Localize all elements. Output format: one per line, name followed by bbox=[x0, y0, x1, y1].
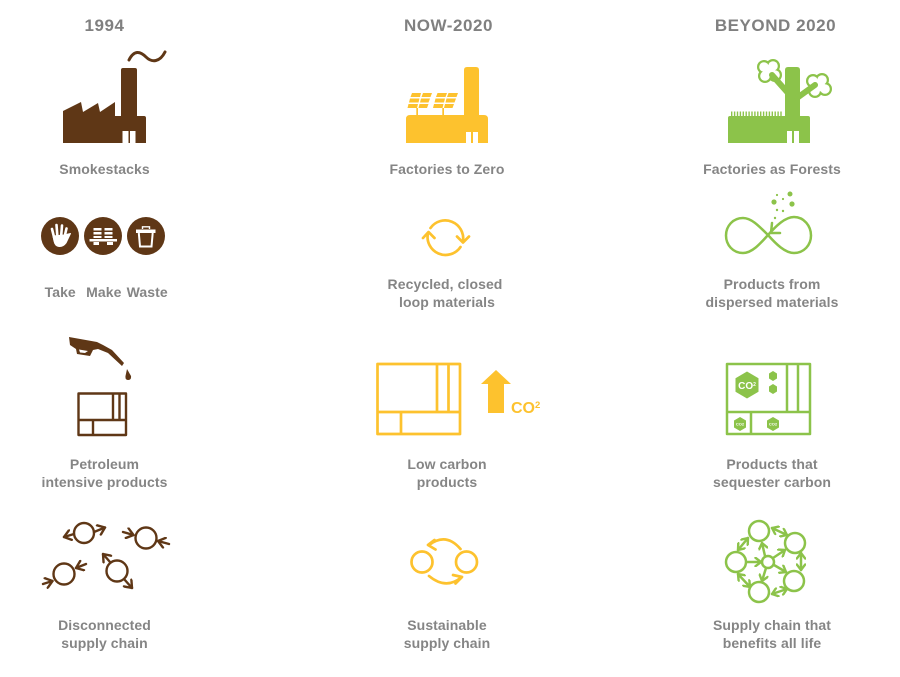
label: Factories as Forests: Factories as Forests bbox=[703, 161, 841, 177]
label: Take Make Waste: Take Make Waste bbox=[45, 284, 168, 300]
label: Products that sequester carbon: Products that bbox=[726, 456, 818, 472]
icon: CO2 up arrow: 2 bbox=[535, 400, 540, 411]
icon: fuel nozzle with drop bbox=[69, 337, 131, 380]
icon: pallet of goods bbox=[84, 217, 122, 255]
label: Recycled, closed loop materials: loop materials bbox=[399, 294, 495, 310]
icon: disconnected supply chain bbox=[43, 523, 169, 588]
icon: carbon sequestering product box bbox=[727, 364, 810, 434]
label: Products that sequester carbon bbox=[713, 456, 831, 490]
label: Products that sequester carbon: sequester carbon bbox=[713, 474, 831, 490]
icon: waste bin bbox=[127, 217, 165, 255]
label: Supply chain that benefits all life bbox=[713, 617, 831, 651]
panel: Beyond 2020 column bbox=[703, 16, 841, 651]
icon: solar factory bbox=[406, 67, 488, 143]
icon: carbon sequestering product box: CO2 bbox=[736, 422, 745, 426]
heading: BEYOND 2020: BEYOND 2020 bbox=[715, 16, 836, 35]
icon: CO2 up arrow bbox=[481, 370, 540, 417]
icon: carbon sequestering product box: CO bbox=[738, 381, 753, 392]
label: Low carbon products: products bbox=[417, 474, 477, 490]
label: Petroleum intensive products: Petroleum bbox=[70, 456, 139, 472]
heading: 1994: 1994 bbox=[84, 16, 125, 35]
icon: low carbon product box bbox=[378, 364, 460, 434]
label: Supply chain that benefits all life: Supply chain that bbox=[713, 617, 831, 633]
icons: take make waste bbox=[41, 217, 165, 255]
label: Petroleum intensive products: intensive products bbox=[42, 474, 168, 490]
label: Sustainable supply chain bbox=[404, 617, 490, 651]
icon: sustainable supply chain bbox=[412, 539, 477, 584]
icon: regenerative supply network bbox=[726, 521, 805, 602]
icon: smokestack factory bbox=[63, 52, 165, 143]
icon: carbon sequestering product box: 2 bbox=[753, 382, 756, 388]
label: Petroleum intensive products bbox=[42, 456, 168, 490]
label: Disconnected supply chain: Disconnected bbox=[58, 617, 151, 633]
icon: infinity loop with dispersed particles bbox=[726, 192, 811, 253]
icon: hand bbox=[41, 217, 79, 255]
heading: NOW-2020: NOW-2020 bbox=[404, 16, 493, 35]
panel: Now-2020 column bbox=[378, 16, 540, 651]
label: Low carbon products bbox=[407, 456, 487, 490]
label: Supply chain that benefits all life: benefits all life bbox=[723, 635, 821, 651]
icon: factory as forest bbox=[728, 59, 832, 143]
label: Sustainable supply chain: Sustainable bbox=[407, 617, 487, 633]
label: Sustainable supply chain: supply chain bbox=[404, 635, 490, 651]
icon: carbon sequestering product box: CO2 bbox=[769, 422, 778, 426]
label: Products from dispersed materials bbox=[705, 276, 839, 310]
panel: 1994 column bbox=[41, 16, 169, 651]
icon: CO2 up arrow: CO bbox=[511, 400, 535, 417]
label: Recycled, closed loop materials: Recycled, closed bbox=[388, 276, 502, 292]
icon: petroleum product box bbox=[78, 394, 126, 435]
label: Recycled, closed loop materials bbox=[388, 276, 502, 310]
label: Products from dispersed materials: dispersed materials bbox=[705, 294, 839, 310]
label: Disconnected supply chain: supply chain bbox=[61, 635, 148, 651]
label: Disconnected supply chain bbox=[58, 617, 151, 651]
label: Smokestacks: Smokestacks bbox=[59, 161, 150, 177]
icon: recycling loop bbox=[423, 220, 469, 255]
label: Low carbon products: Low carbon bbox=[407, 456, 487, 472]
label: Factories to Zero: Factories to Zero bbox=[390, 161, 504, 177]
label: Products from dispersed materials: Products from bbox=[724, 276, 820, 292]
